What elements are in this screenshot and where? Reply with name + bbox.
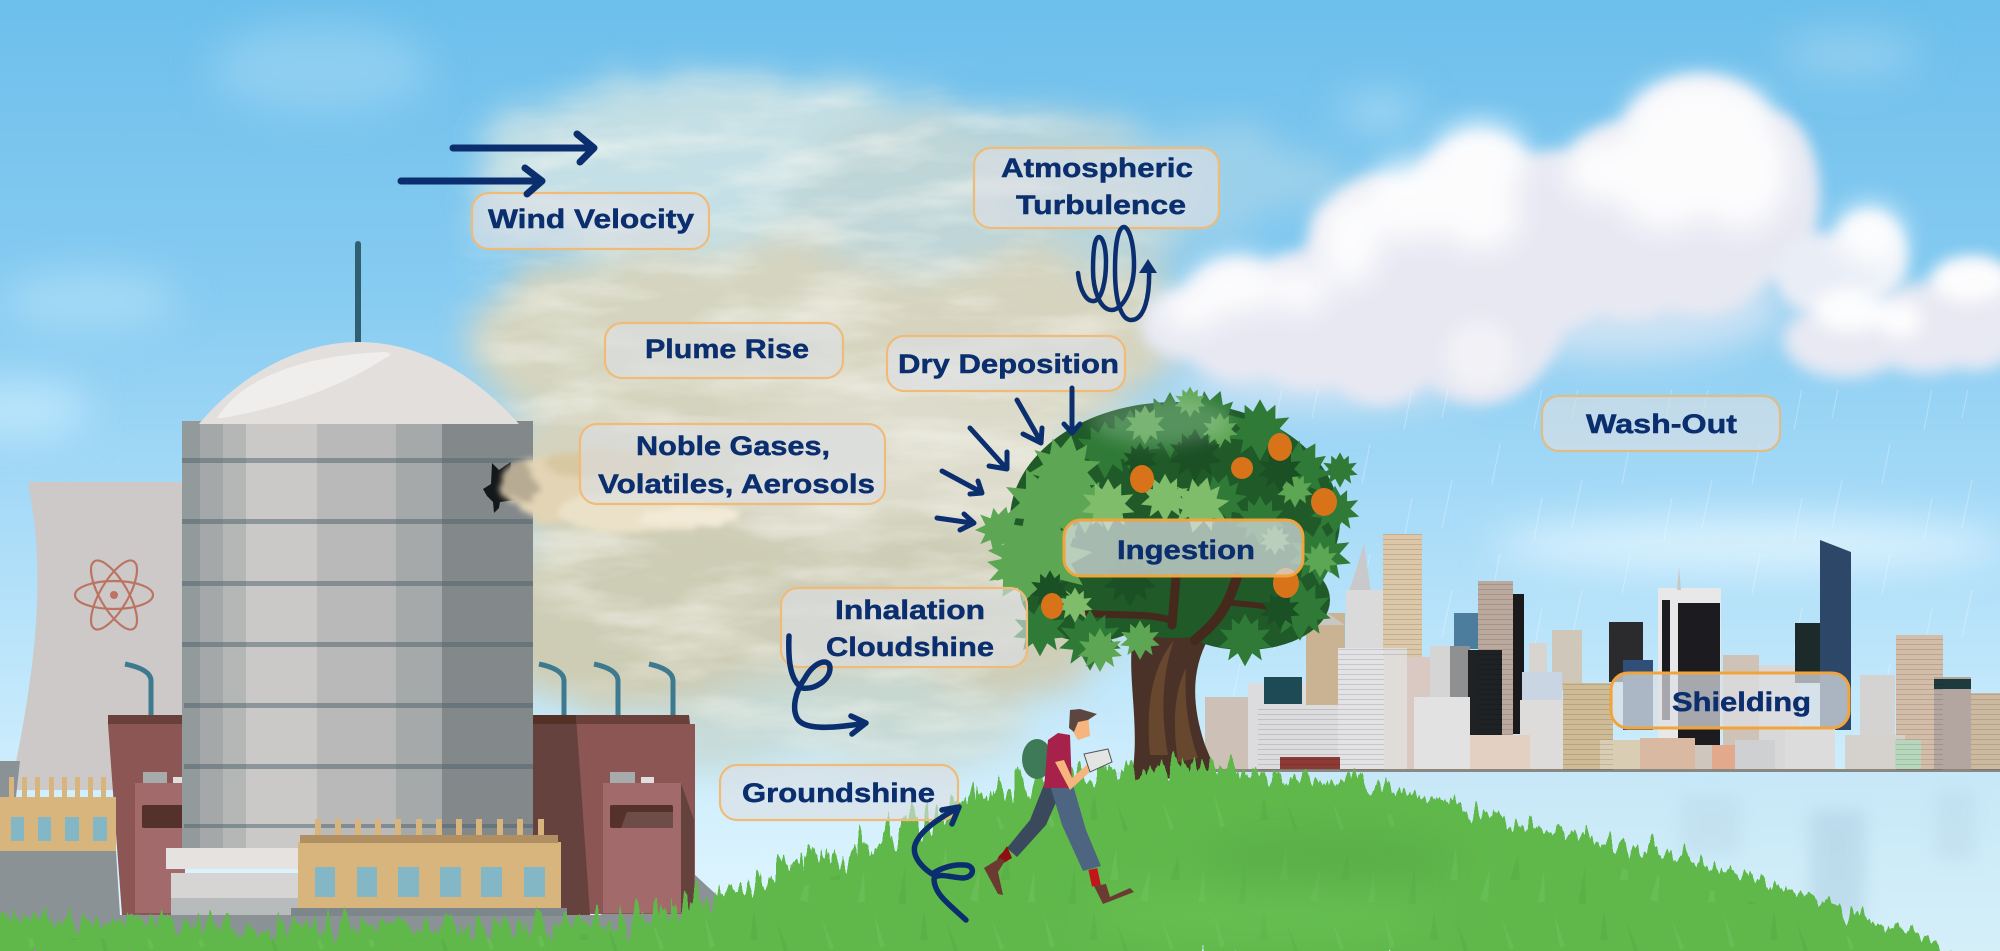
- label: inhalation cloudshine: Cloudshine: [826, 632, 994, 662]
- dome: [199, 342, 519, 424]
- hair: [1069, 709, 1097, 732]
- release jet from breach: [500, 451, 740, 534]
- arrow: wind upper: [453, 134, 594, 162]
- label: wash-out: Wash-Out: [1586, 409, 1737, 439]
- person walking: [984, 709, 1134, 904]
- icon: atom: [75, 554, 153, 636]
- arrow: inhalation cloudshine: [789, 636, 866, 734]
- faint background clouds: [0, 25, 2000, 573]
- service block left: [0, 777, 116, 851]
- label: wind velocity: [472, 193, 709, 249]
- storm cloud small right: [1783, 258, 2000, 378]
- label: groundshine: Groundshine: [742, 778, 935, 808]
- arrow: turbulence spiral: [1078, 227, 1157, 320]
- label: inhalation cloudshine: Inhalation: [835, 595, 985, 625]
- reactor containment building: [182, 241, 533, 849]
- ground slab: [0, 761, 760, 951]
- label: ingestion: [1064, 520, 1303, 576]
- arm: [1055, 760, 1094, 790]
- label: plume rise: Plume Rise: [645, 334, 809, 364]
- label: noble gases, volatiles, aerosols: Noble Gases,: [636, 431, 830, 461]
- label: groundshine: [720, 765, 958, 820]
- label: wash-out: [1542, 396, 1780, 451]
- city skyline: [1200, 534, 2000, 772]
- floor lines on large towers: [1258, 534, 2000, 772]
- arrow: wind lower: [401, 168, 542, 194]
- lamp posts: [125, 664, 673, 716]
- back shoe: [984, 858, 1005, 895]
- label: ingestion: Ingestion: [1117, 535, 1255, 565]
- book: [1084, 749, 1112, 772]
- label: atmospheric turbulence: Atmospheric: [1001, 153, 1193, 183]
- label: noble gases, volatiles, aerosols: [580, 424, 885, 504]
- label: dry deposition: [887, 336, 1125, 391]
- back leg: [1007, 782, 1065, 857]
- breach hole: [483, 462, 518, 513]
- branches: [1064, 577, 1295, 640]
- label: shielding: [1611, 673, 1849, 728]
- label: atmospheric turbulence: Turbulence: [1016, 190, 1186, 220]
- left annex building: [108, 715, 185, 915]
- label: atmospheric turbulence: [974, 148, 1219, 228]
- arrows: dry deposition: [937, 388, 1080, 530]
- antenna: [355, 241, 361, 345]
- arrow: groundshine: [914, 807, 972, 920]
- head: [1070, 714, 1090, 740]
- cylinder: [182, 421, 200, 849]
- label: noble gases, volatiles, aerosols: Volatiles, Aerosols: [598, 469, 875, 499]
- leaves: [1014, 381, 1359, 671]
- grass hill: [0, 768, 1990, 951]
- backpack: [1022, 739, 1052, 779]
- tree trunk: [1095, 625, 1216, 795]
- shirt: [1044, 733, 1072, 788]
- cooling tower: [10, 482, 190, 790]
- label: wind velocity: Wind Velocity: [488, 204, 694, 234]
- grass texture: [0, 795, 1880, 951]
- fruits: [1041, 433, 1337, 619]
- rain streaks: [1180, 390, 2000, 780]
- label: shielding: Shielding: [1672, 687, 1811, 717]
- service block centre: [166, 819, 567, 916]
- haze over tree: [1090, 395, 1230, 445]
- radioactive plume cloud: [460, 75, 1340, 770]
- label: plume rise: [605, 323, 843, 378]
- front shoe: [1094, 884, 1134, 904]
- label: dry deposition: Dry Deposition: [898, 349, 1119, 379]
- storm cloud large: [1140, 75, 1908, 410]
- lake with reflection: [1100, 772, 2000, 951]
- tree canopy: [970, 381, 1359, 672]
- right annex building: [533, 715, 695, 915]
- front leg: [1050, 785, 1101, 871]
- label: inhalation cloudshine: [781, 588, 1027, 667]
